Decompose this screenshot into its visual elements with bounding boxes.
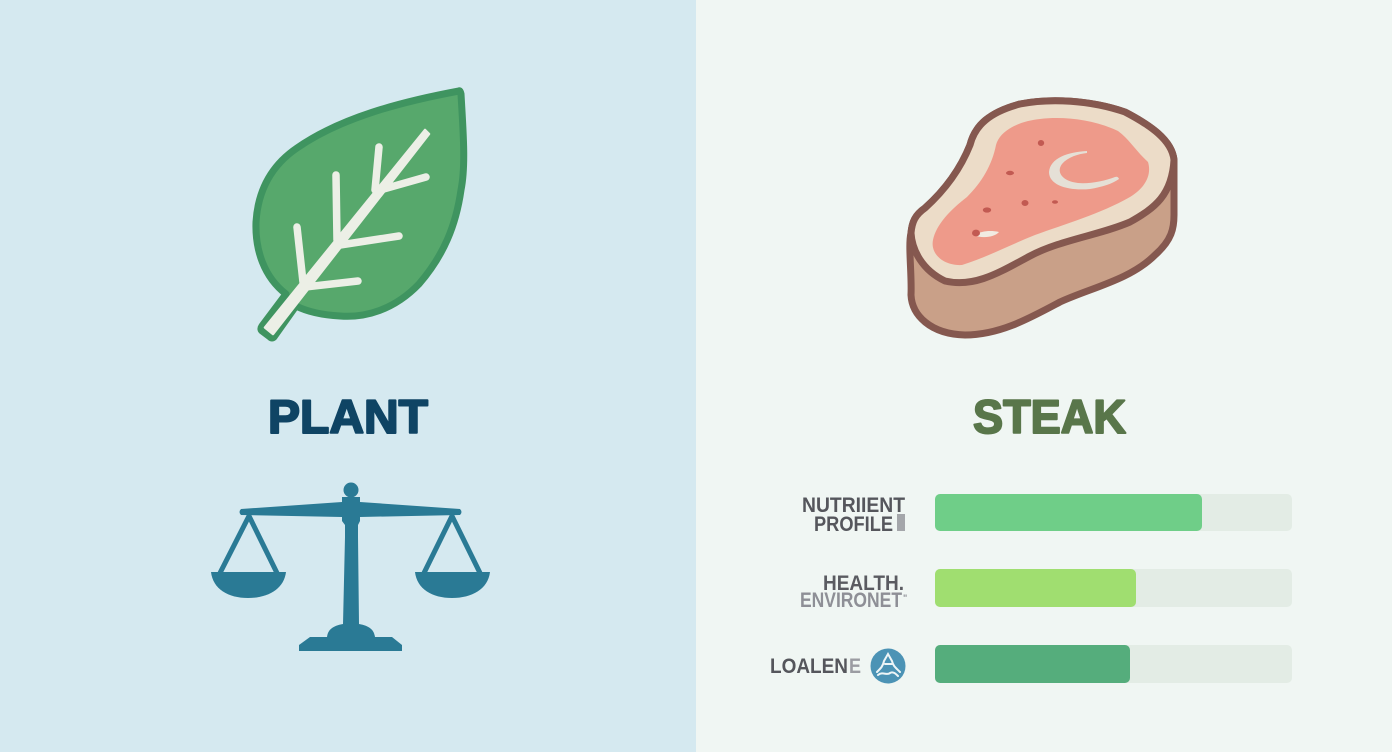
steak meat [933,118,1149,265]
label: loalene: LOALEN [770,655,848,678]
label: health environment: HEALTH. [823,572,904,595]
steak fat cap [911,101,1174,283]
label: health environment: " [903,593,907,603]
leaf veins [265,130,429,334]
bar: nutrient profile [935,494,1292,531]
heading: STEAK: STEAK [973,390,1126,443]
steak side [910,101,1174,335]
label: nutrient profile: PROFILE [814,513,893,536]
icon: steak [910,101,1174,335]
panel: plant [0,0,696,752]
heading: PLANT: PLANT [268,390,428,443]
row: nutrient profile [802,494,1292,536]
label: nutrient profile: NUTRIIENT [802,494,905,517]
label: loalene: E [849,655,861,678]
icon: round badge [870,648,906,684]
icon: leaf [256,91,464,338]
steak marbling [1049,151,1119,189]
bar: health environment [935,569,1292,607]
label: nutrient profile [802,494,905,536]
steak dots [972,140,1058,236]
label: health environment: ENVIRONET [800,589,902,612]
row: health environment [800,569,1292,612]
row: local [770,645,1292,684]
bar: local [935,645,1292,683]
label: health environment [800,572,907,612]
panel: steak [696,0,1392,752]
icon: balance scale [211,482,490,651]
